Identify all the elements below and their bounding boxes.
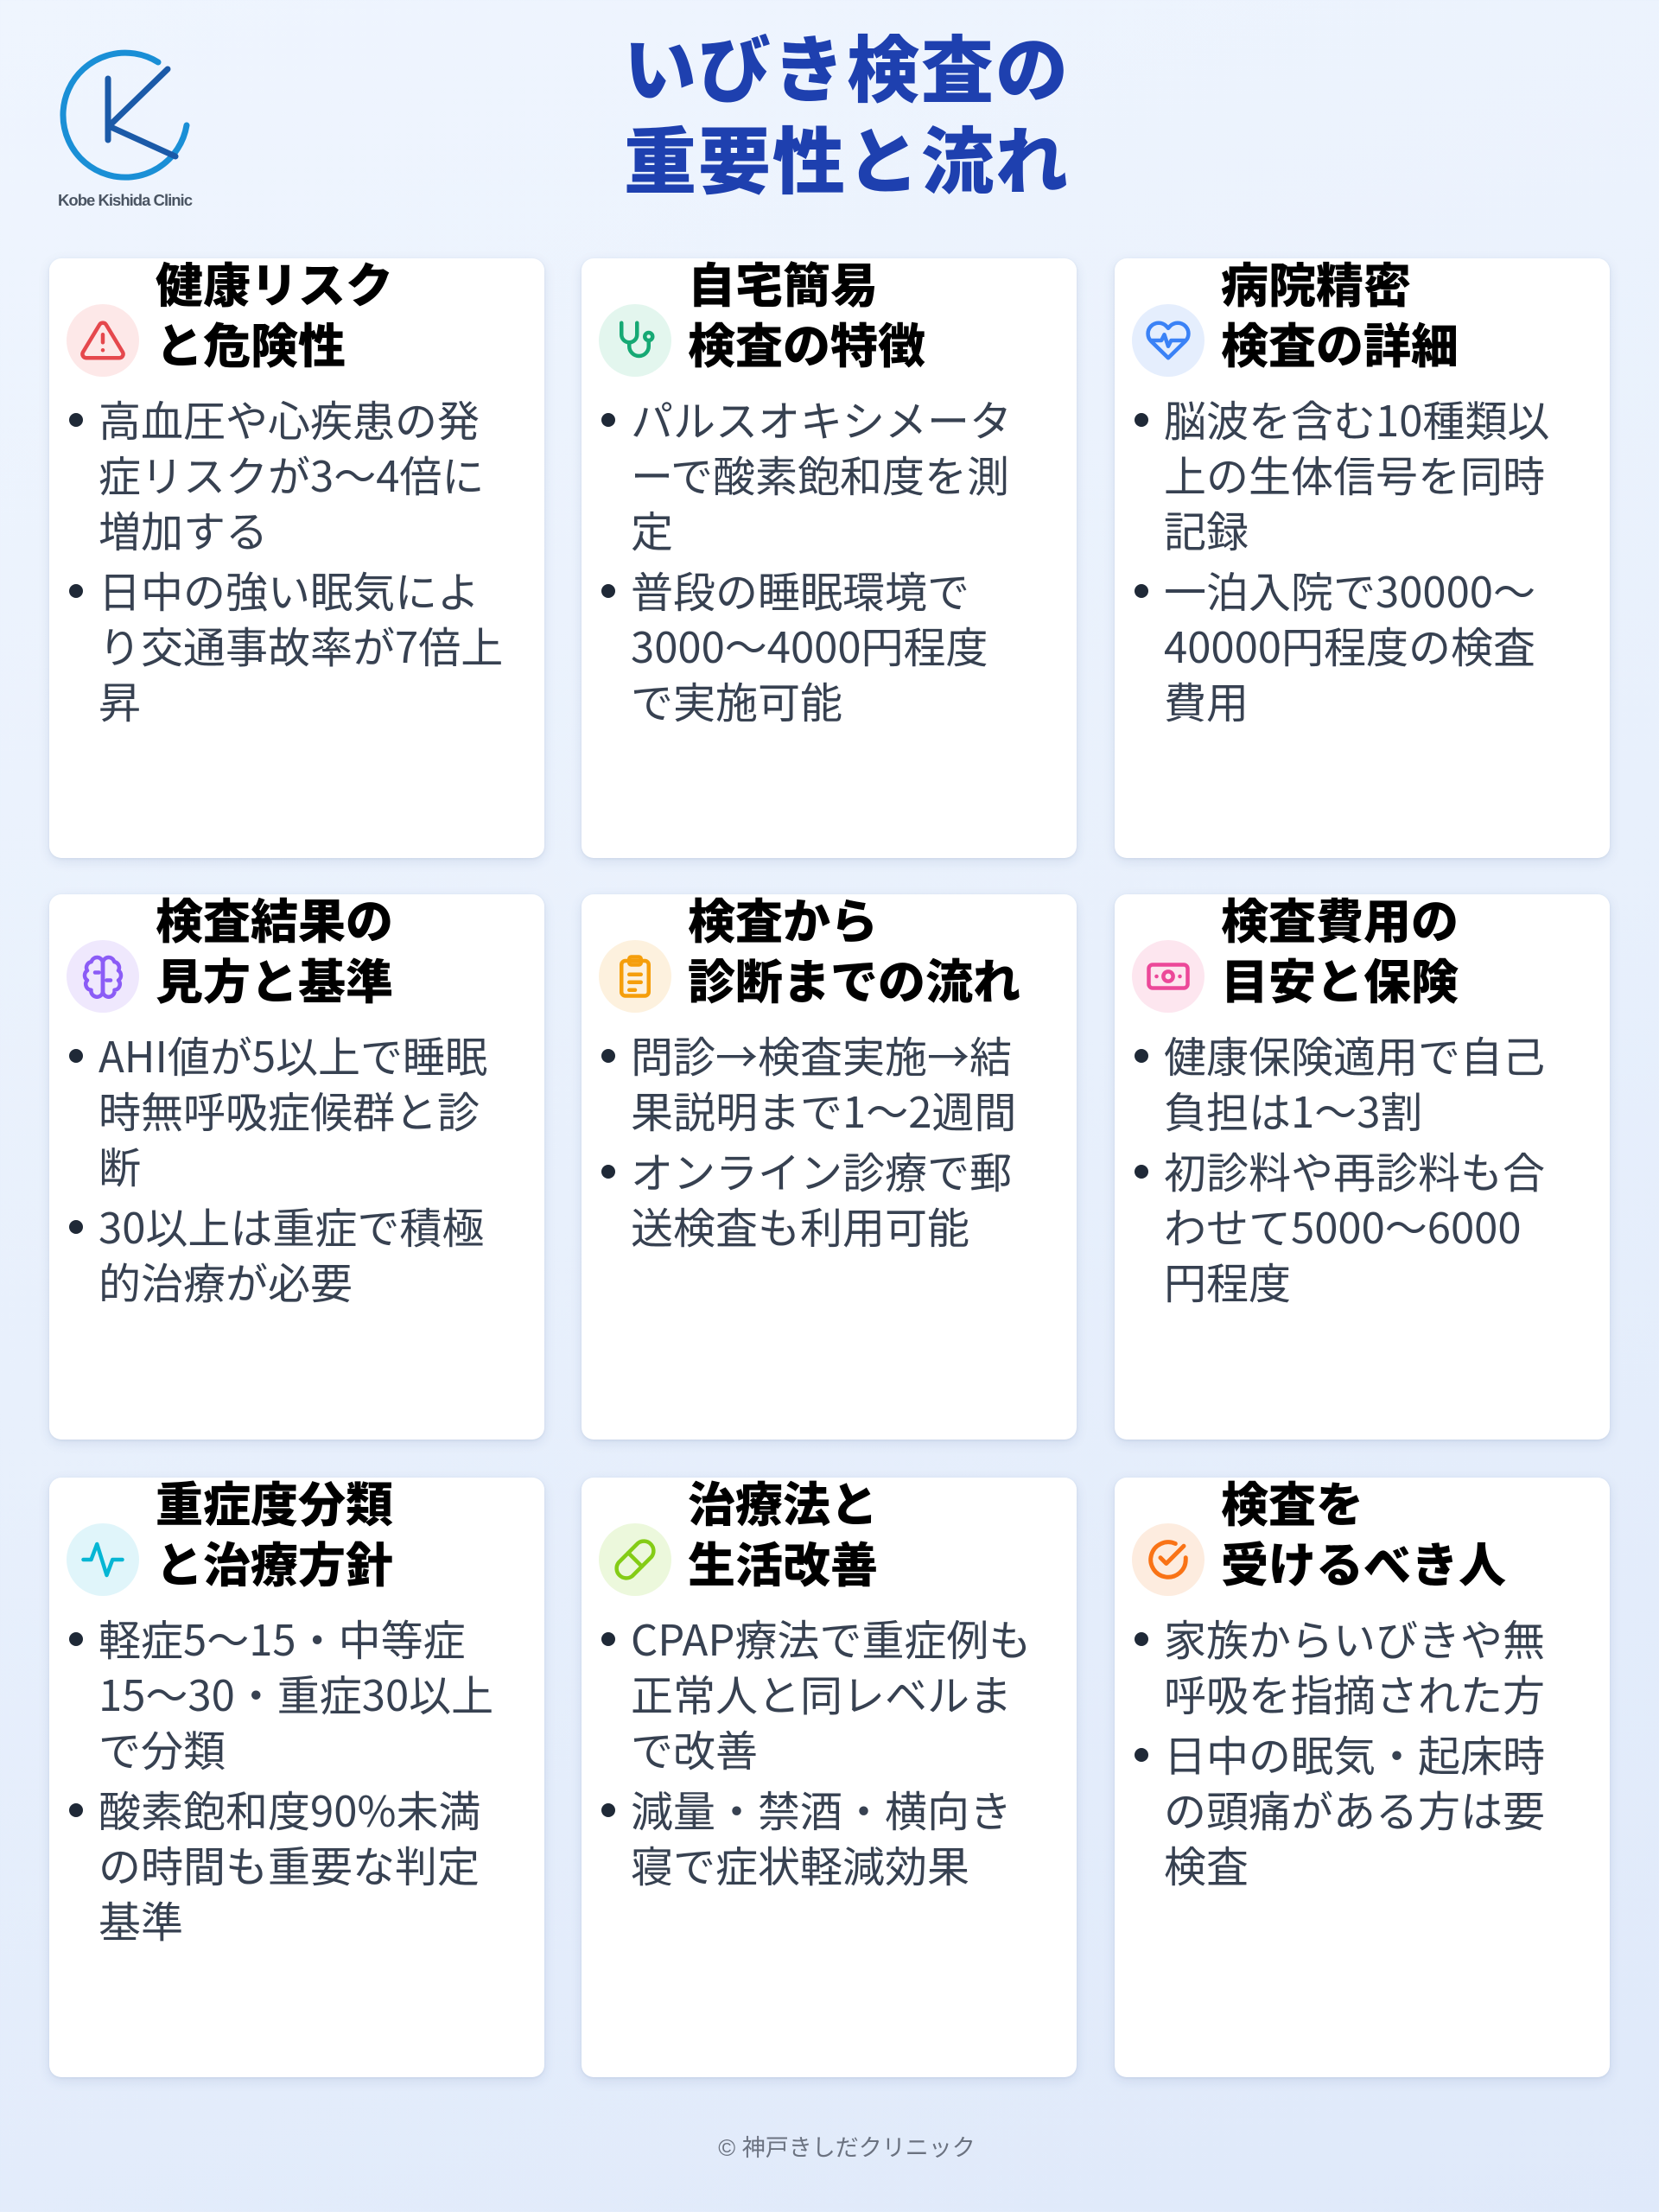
icon: pill <box>599 1523 671 1596</box>
heading: 重症度分類 <box>156 1478 393 1532</box>
logo: Kobe Kishida Clinic <box>58 191 193 209</box>
heading: 検査の詳細 <box>1221 320 1459 373</box>
bullets: 普段の睡眠環境で <box>631 559 969 620</box>
bullets: 円程度 <box>1164 1250 1291 1312</box>
bullets: の時間も重要な判定 <box>99 1834 480 1895</box>
bullets: 40000円程度の検査 <box>1164 614 1535 676</box>
heading: 目安と保険 <box>1221 956 1459 1009</box>
footer: © 神戸きしだクリニック <box>718 2135 976 2161</box>
bullets: 昇 <box>99 670 141 731</box>
bullets: 記録 <box>1164 499 1249 560</box>
heading: と危険性 <box>156 320 346 373</box>
heading: 検査費用の <box>1221 895 1459 949</box>
heading <box>1221 1478 1506 1592</box>
bullets <box>69 388 503 731</box>
bullets: 費用 <box>1164 670 1249 731</box>
bullets <box>69 1024 487 1312</box>
bullets: で改善 <box>631 1718 758 1779</box>
heading: 見方と基準 <box>156 956 393 1009</box>
icon: activity <box>67 1523 139 1596</box>
bullets: 定 <box>631 499 673 560</box>
heading: 自宅簡易 <box>688 259 878 313</box>
heading <box>1221 259 1459 373</box>
icon: heart pulse <box>1132 304 1205 377</box>
bullets: 負担は1〜3割 <box>1164 1079 1422 1141</box>
heading <box>1221 895 1459 1009</box>
heading <box>156 1478 393 1592</box>
panel: results <box>49 894 544 1440</box>
bullets: 家族からいびきや無 <box>1164 1607 1545 1669</box>
heading: 検査を <box>1221 1478 1363 1532</box>
panel: treatment <box>582 1478 1077 2077</box>
icon: clipboard <box>599 940 671 1013</box>
bullets <box>69 1607 493 1950</box>
heading <box>688 259 925 373</box>
bullets: 高血圧や心疾患の発 <box>99 388 480 449</box>
panel: flow <box>582 894 1077 1440</box>
bullets <box>601 388 1012 731</box>
bullets: 軽症5〜15・中等症 <box>99 1607 466 1669</box>
heading: 健康リスク <box>156 259 393 313</box>
bullets: の頭痛がある方は要 <box>1164 1778 1545 1840</box>
bullets: 送検査も利用可能 <box>631 1195 969 1256</box>
title: いびき検査の <box>624 30 1070 111</box>
heading <box>156 895 393 1009</box>
bullets: 的治療が必要 <box>99 1250 353 1312</box>
bullets: 断 <box>99 1135 141 1196</box>
heading <box>688 1478 878 1592</box>
bullets: 減量・禁酒・横向き <box>631 1778 1012 1840</box>
heading: 生活改善 <box>688 1539 878 1592</box>
icon: brain <box>67 940 139 1013</box>
heading <box>688 895 1020 1009</box>
bullets <box>1135 1024 1545 1312</box>
bullets: 15〜30・重症30以上 <box>99 1662 493 1724</box>
logo <box>58 50 193 209</box>
title <box>624 30 1070 203</box>
bullets: 呼吸を指摘された方 <box>1164 1662 1545 1724</box>
heading: 病院精密 <box>1221 259 1411 313</box>
bullets: 増加する <box>99 499 268 560</box>
heading: 検査結果の <box>156 895 393 949</box>
bullets <box>601 1024 1016 1256</box>
heading: 治療法と <box>688 1478 878 1532</box>
bullets: わせて5000〜6000 <box>1164 1195 1522 1256</box>
bullets: 問診→検査実施→結 <box>631 1024 1012 1085</box>
bullets: 30以上は重症で積極 <box>99 1195 484 1256</box>
panel: who should test <box>1115 1478 1610 2077</box>
heading: 受けるべき人 <box>1221 1539 1506 1592</box>
bullets: CPAP療法で重症例も <box>631 1607 1031 1669</box>
bullets: 初診料や再診料も合 <box>1164 1140 1545 1201</box>
bullets: 日中の強い眠気によ <box>99 559 480 620</box>
icon: check circle <box>1132 1523 1205 1596</box>
bullets: 脳波を含む10種類以 <box>1164 388 1549 449</box>
bullets <box>601 1607 1031 1895</box>
panel: severity <box>49 1478 544 2077</box>
heading: と治療方針 <box>156 1539 393 1592</box>
bullets: 果説明まで1〜2週間 <box>631 1079 1016 1141</box>
bullets: 症リスクが3〜4倍に <box>99 443 484 505</box>
panel: home test <box>582 258 1077 858</box>
bullets: 基準 <box>99 1889 183 1950</box>
icon: warning <box>67 304 139 377</box>
bullets: 正常人と同レベルま <box>631 1662 1012 1724</box>
panel: health risk <box>49 258 544 858</box>
bullets: オンライン診療で郵 <box>631 1140 1012 1201</box>
bullets: 上の生体信号を同時 <box>1164 443 1545 505</box>
panel: cost <box>1115 894 1610 1440</box>
panel: hospital test <box>1115 258 1610 858</box>
bullets: 3000〜4000円程度 <box>631 614 988 676</box>
bullets: 健康保険適用で自己 <box>1164 1024 1545 1085</box>
bullets: ーで酸素飽和度を測 <box>631 443 1009 505</box>
heading: 検査の特徴 <box>688 320 925 373</box>
bullets: 時無呼吸症候群と診 <box>99 1079 480 1141</box>
heading <box>156 259 393 373</box>
bullets <box>1135 1607 1545 1895</box>
bullets: AHI値が5以上で睡眠 <box>99 1024 487 1085</box>
icon: money <box>1132 940 1205 1013</box>
bullets: 検査 <box>1164 1834 1249 1895</box>
bullets <box>1135 388 1549 731</box>
bullets: 日中の眠気・起床時 <box>1164 1723 1545 1784</box>
bullets: り交通事故率が7倍上 <box>99 614 503 676</box>
heading: 検査から <box>688 895 878 949</box>
bullets: 酸素飽和度90%未満 <box>99 1778 481 1840</box>
heading: 診断までの流れ <box>688 956 1020 1009</box>
bullets: で実施可能 <box>631 670 842 731</box>
bullets: パルスオキシメータ <box>631 388 1012 449</box>
icon: stethoscope <box>599 304 671 377</box>
bullets: で分類 <box>99 1718 226 1779</box>
bullets: 一泊入院で30000〜 <box>1164 559 1535 620</box>
title: 重要性と流れ <box>624 122 1070 203</box>
bullets: 寝で症状軽減効果 <box>631 1834 969 1895</box>
